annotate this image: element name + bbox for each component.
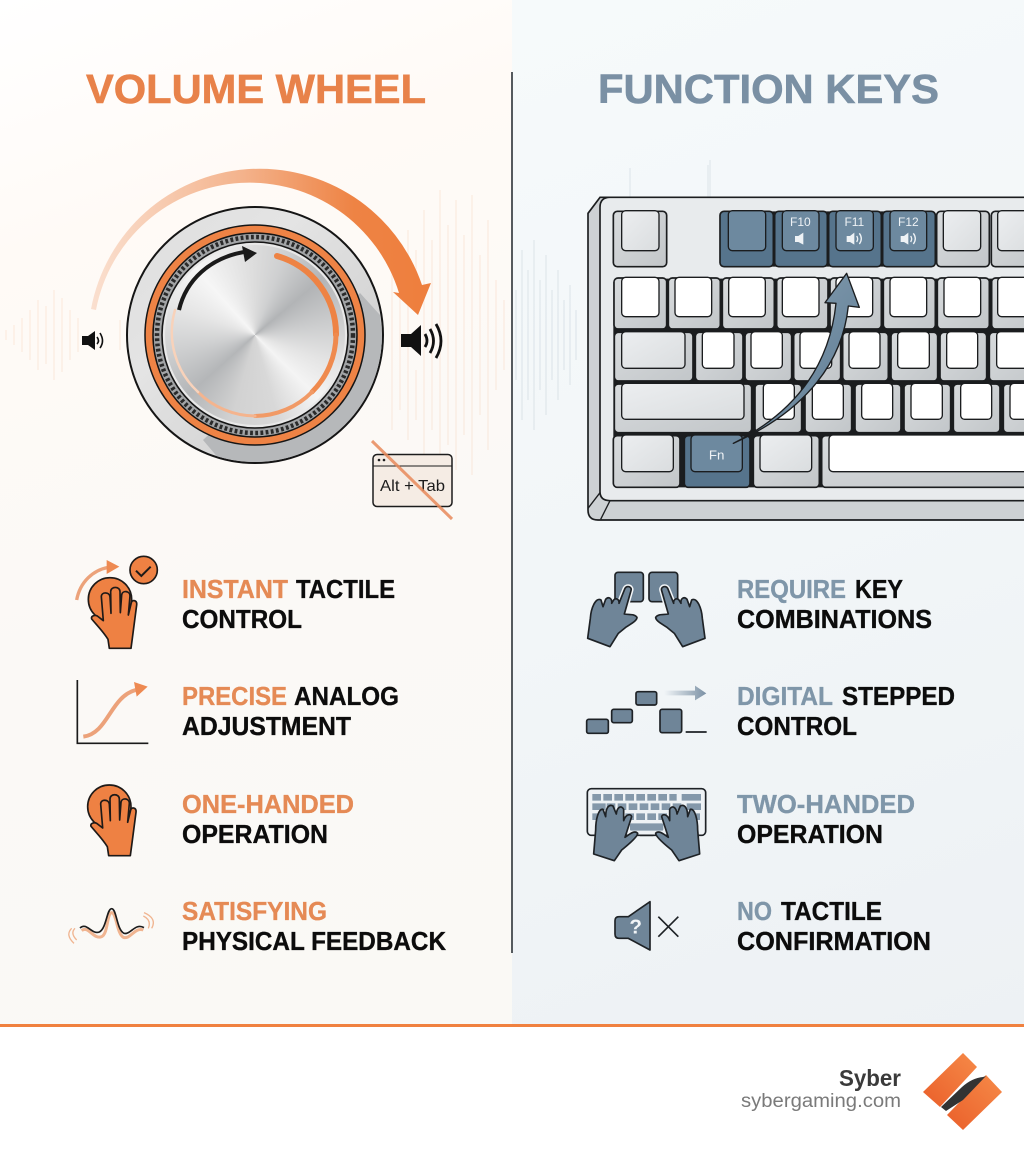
panel: volume wheel background [0, 0, 512, 1025]
row: require key combinations: REQUIRE [737, 574, 846, 604]
icon: feedback wave [69, 909, 153, 943]
icon: stepped blocks [587, 686, 707, 733]
row: require key combinations [588, 572, 932, 647]
panel: function keys background [512, 0, 1024, 1025]
title: volume wheel: VOLUME WHEEL [86, 66, 426, 112]
row: digital stepped control: STEPPED [842, 681, 955, 711]
icon: high volume speaker [401, 323, 442, 359]
knob outer ring [126, 206, 384, 464]
row: instant tactile control: CONTROL [182, 604, 302, 634]
third letter row [614, 383, 1024, 433]
F11 key label: F11 [844, 215, 865, 229]
row: precise analog adjustment: PRECISE [182, 681, 287, 711]
row: digital stepped control: DIGITAL [737, 681, 833, 711]
row: require key combinations: KEY [855, 574, 903, 604]
icon: two hands pressing keys [588, 572, 705, 647]
row: precise analog adjustment: ADJUSTMENT [182, 711, 351, 741]
icon: speaker with question mark: ? [629, 915, 642, 938]
row: one-handed operation: ONE-HANDED [182, 789, 354, 819]
title: function keys: FUNCTION KEYS [598, 66, 939, 112]
F10 key label: F10 [790, 215, 811, 229]
row: precise analog adjustment [77, 680, 399, 743]
footer [0, 1024, 1024, 1154]
level arc and direction arrow [170, 246, 339, 418]
knob rings [144, 224, 382, 462]
row: require key combinations: COMBINATIONS [737, 604, 932, 634]
icon: hands on keyboard [587, 789, 706, 861]
row: precise analog adjustment: ANALOG [294, 681, 399, 711]
row: no tactile confirmation: NO [737, 896, 772, 926]
row: instant tactile control: TACTILE [296, 574, 395, 604]
row: no tactile confirmation [615, 896, 931, 956]
divider [511, 72, 512, 953]
rotation arrow [91, 168, 431, 315]
number row [614, 277, 1024, 329]
row: one-handed operation: OPERATION [182, 819, 328, 849]
keyboard illustration [587, 196, 1024, 521]
icon: one hand on knob [88, 785, 136, 856]
volume knob [126, 206, 384, 464]
function row [613, 211, 1024, 267]
row: instant tactile control: INSTANT [182, 574, 288, 604]
second letter row [614, 332, 1024, 381]
callout: crossed-out Alt + Tab [371, 440, 453, 520]
bottom row [613, 435, 1024, 487]
row: digital stepped control [587, 681, 955, 741]
F12 key label: F12 [898, 215, 919, 229]
footer brand text: Syber [839, 1065, 901, 1091]
arrow: Fn to F11 [733, 273, 859, 443]
row: two-handed operation: OPERATION [737, 819, 883, 849]
row: two-handed operation: TWO-HANDED [737, 789, 915, 819]
row: no tactile confirmation: CONFIRMATION [737, 926, 931, 956]
row: two-handed operation [587, 789, 915, 861]
row: instant tactile control [77, 556, 395, 648]
row: one-handed operation [88, 785, 354, 856]
brushed metal disc [165, 245, 345, 425]
row: satisfying physical feedback [69, 896, 446, 956]
Fn key label: Fn [709, 447, 724, 462]
row: no tactile confirmation: TACTILE [781, 896, 882, 926]
row: digital stepped control: CONTROL [737, 711, 857, 741]
F12 key label [898, 215, 919, 245]
row: satisfying physical feedback: SATISFYING [182, 896, 327, 926]
icon: analog curve graph [77, 680, 148, 743]
F10 key label [790, 215, 811, 245]
footer brand text: sybergaming.com [741, 1091, 901, 1112]
F11 key label [844, 215, 865, 245]
callout: crossed-out Alt + Tab: Alt + Tab [380, 478, 445, 495]
icon: low volume speaker [82, 331, 104, 350]
keyboard case [588, 197, 1024, 520]
benefit rows: volume wheel [68, 556, 446, 956]
row: satisfying physical feedback: PHYSICAL FEEDBACK [182, 926, 446, 956]
icon: hand on knob with check [77, 556, 157, 648]
